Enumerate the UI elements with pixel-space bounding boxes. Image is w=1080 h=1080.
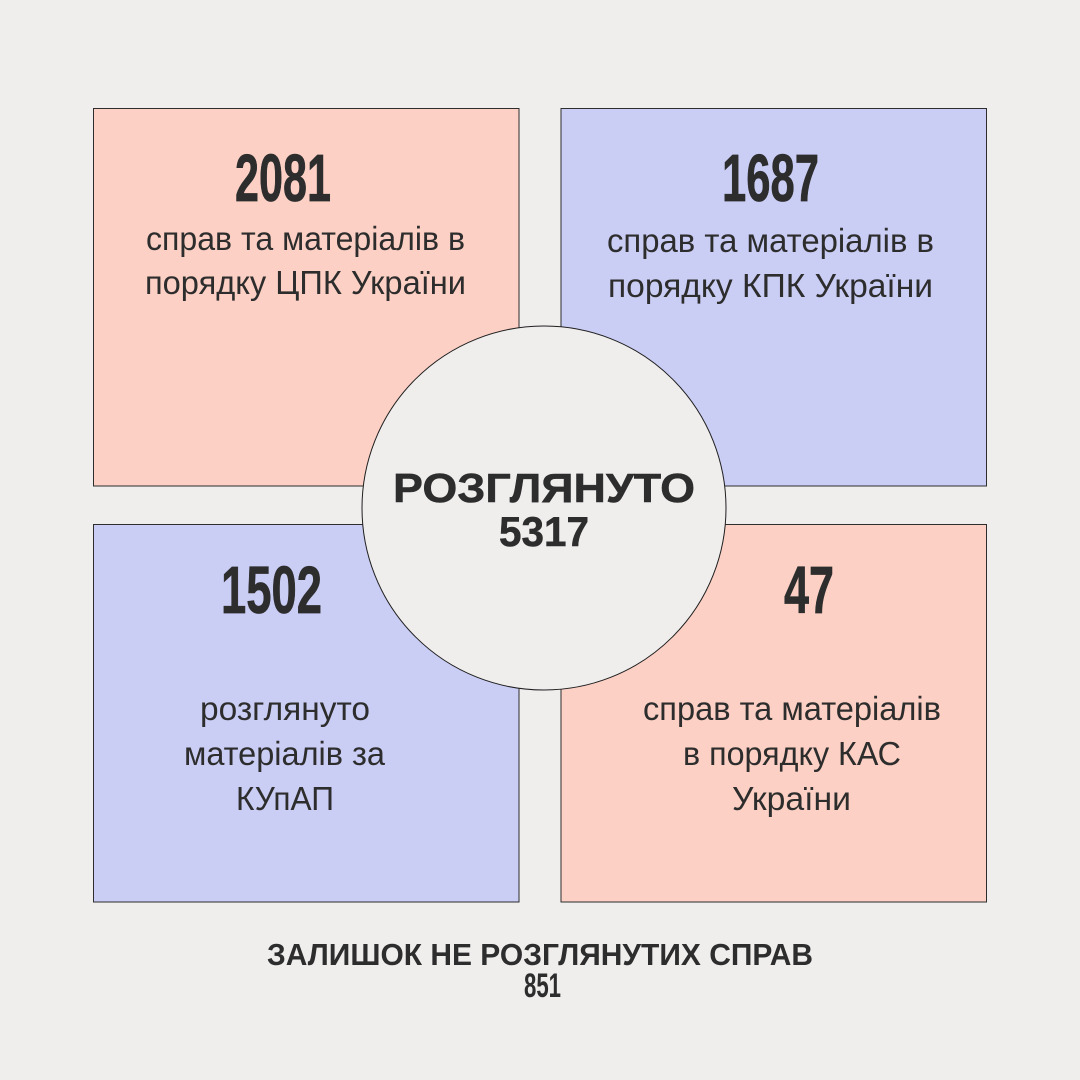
number: 1687: 1687 (722, 141, 819, 216)
text: КУпАП description: матеріалів за (184, 735, 386, 772)
text: ЦПК description: справ та матеріалів в (146, 220, 465, 257)
footer heading: ЗАЛИШОК НЕ РОЗГЛЯНУТИХ СПРАВ (267, 937, 813, 972)
number: 47: 47 (784, 553, 834, 628)
text: КАС description (643, 690, 941, 817)
panel: КПК cases (561, 108, 986, 486)
text: КУпАП description (184, 690, 386, 817)
text: КПК description (607, 222, 934, 304)
number: 851: 851 (524, 967, 561, 1005)
text: ЦПК description (145, 220, 466, 301)
number: 5317: 5317 (499, 508, 589, 555)
text: КПК description: порядку КПК України (608, 267, 933, 304)
text: ЦПК description: порядку ЦПК України (145, 264, 466, 301)
panel: КАС cases (561, 524, 986, 902)
text: КУпАП description: розглянуто (200, 690, 370, 727)
footer: remaining cases (267, 937, 813, 1005)
text: КПК description: справ та матеріалів в (607, 222, 934, 259)
heading: РОЗГЛЯНУТО: РОЗГЛЯНУТО (393, 465, 695, 511)
text: КУпАП description: КУпАП (236, 780, 334, 817)
text: КАС description: України (732, 780, 851, 817)
number: 2081: 2081 (235, 141, 331, 216)
text: КАС description: в порядку КАС (683, 735, 901, 772)
panel: ЦПК cases (94, 108, 519, 486)
number: 1502: 1502 (221, 553, 322, 628)
panel: КУпАП materials (94, 524, 519, 902)
central circle: total reviewed (362, 326, 726, 690)
text: КАС description: справ та матеріалів (643, 690, 941, 727)
